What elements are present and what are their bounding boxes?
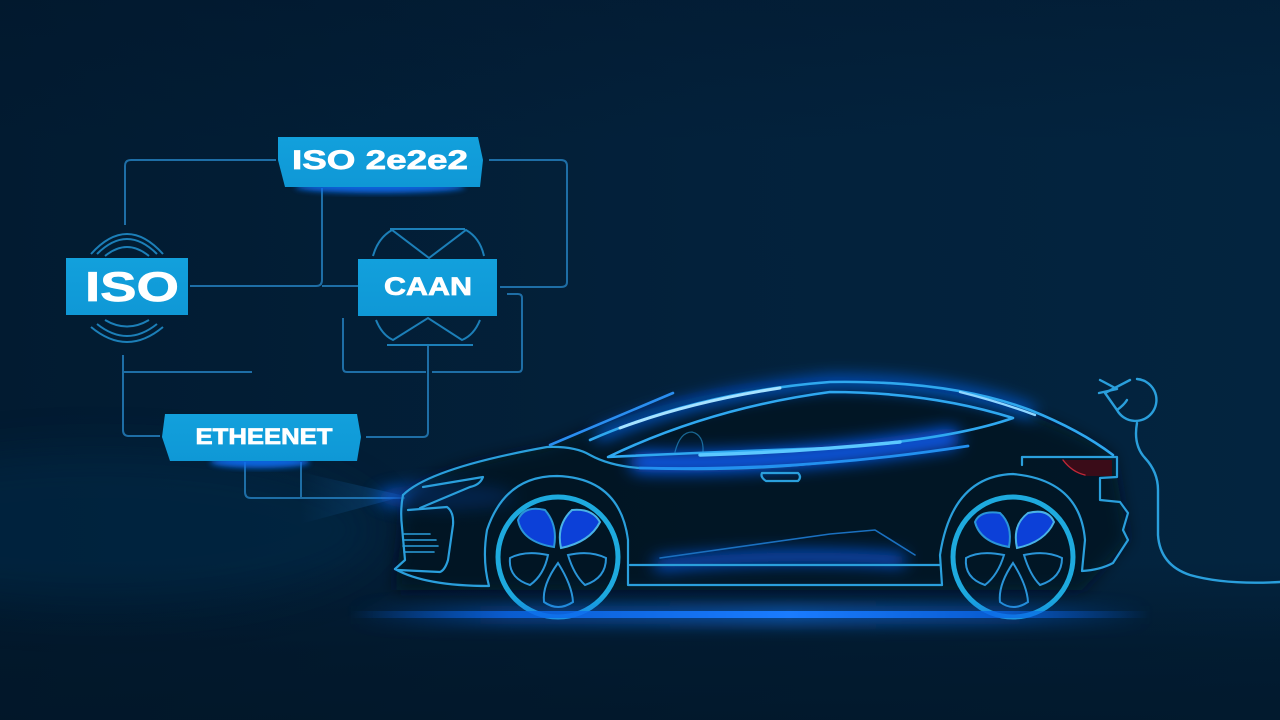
box: Ethernet: ETHEENET (196, 424, 333, 449)
car (395, 382, 1128, 590)
rear wheel (953, 497, 1073, 617)
ground light line (350, 606, 1150, 624)
box: ISO 2e2e2: ISO 2e2e2 (292, 145, 468, 175)
box: ISO with signal arcs: ISO (85, 263, 179, 310)
box: CAN with hexagon icon (358, 229, 497, 345)
roof and window highlights (550, 393, 673, 445)
front wheel (498, 497, 618, 617)
connector lines between standards boxes (123, 160, 567, 498)
box: ISO with signal arcs (66, 234, 188, 342)
car outline (395, 432, 1128, 586)
headlight beam (300, 472, 515, 524)
body glows (600, 382, 1030, 564)
tail light (1063, 460, 1112, 476)
car body shading (395, 382, 1128, 590)
box: Ethernet (162, 414, 361, 468)
charging plug and cable (1099, 379, 1280, 583)
box: CAN with hexagon icon: CAAN (384, 273, 472, 301)
box: ISO 2e2e2 (278, 137, 483, 193)
